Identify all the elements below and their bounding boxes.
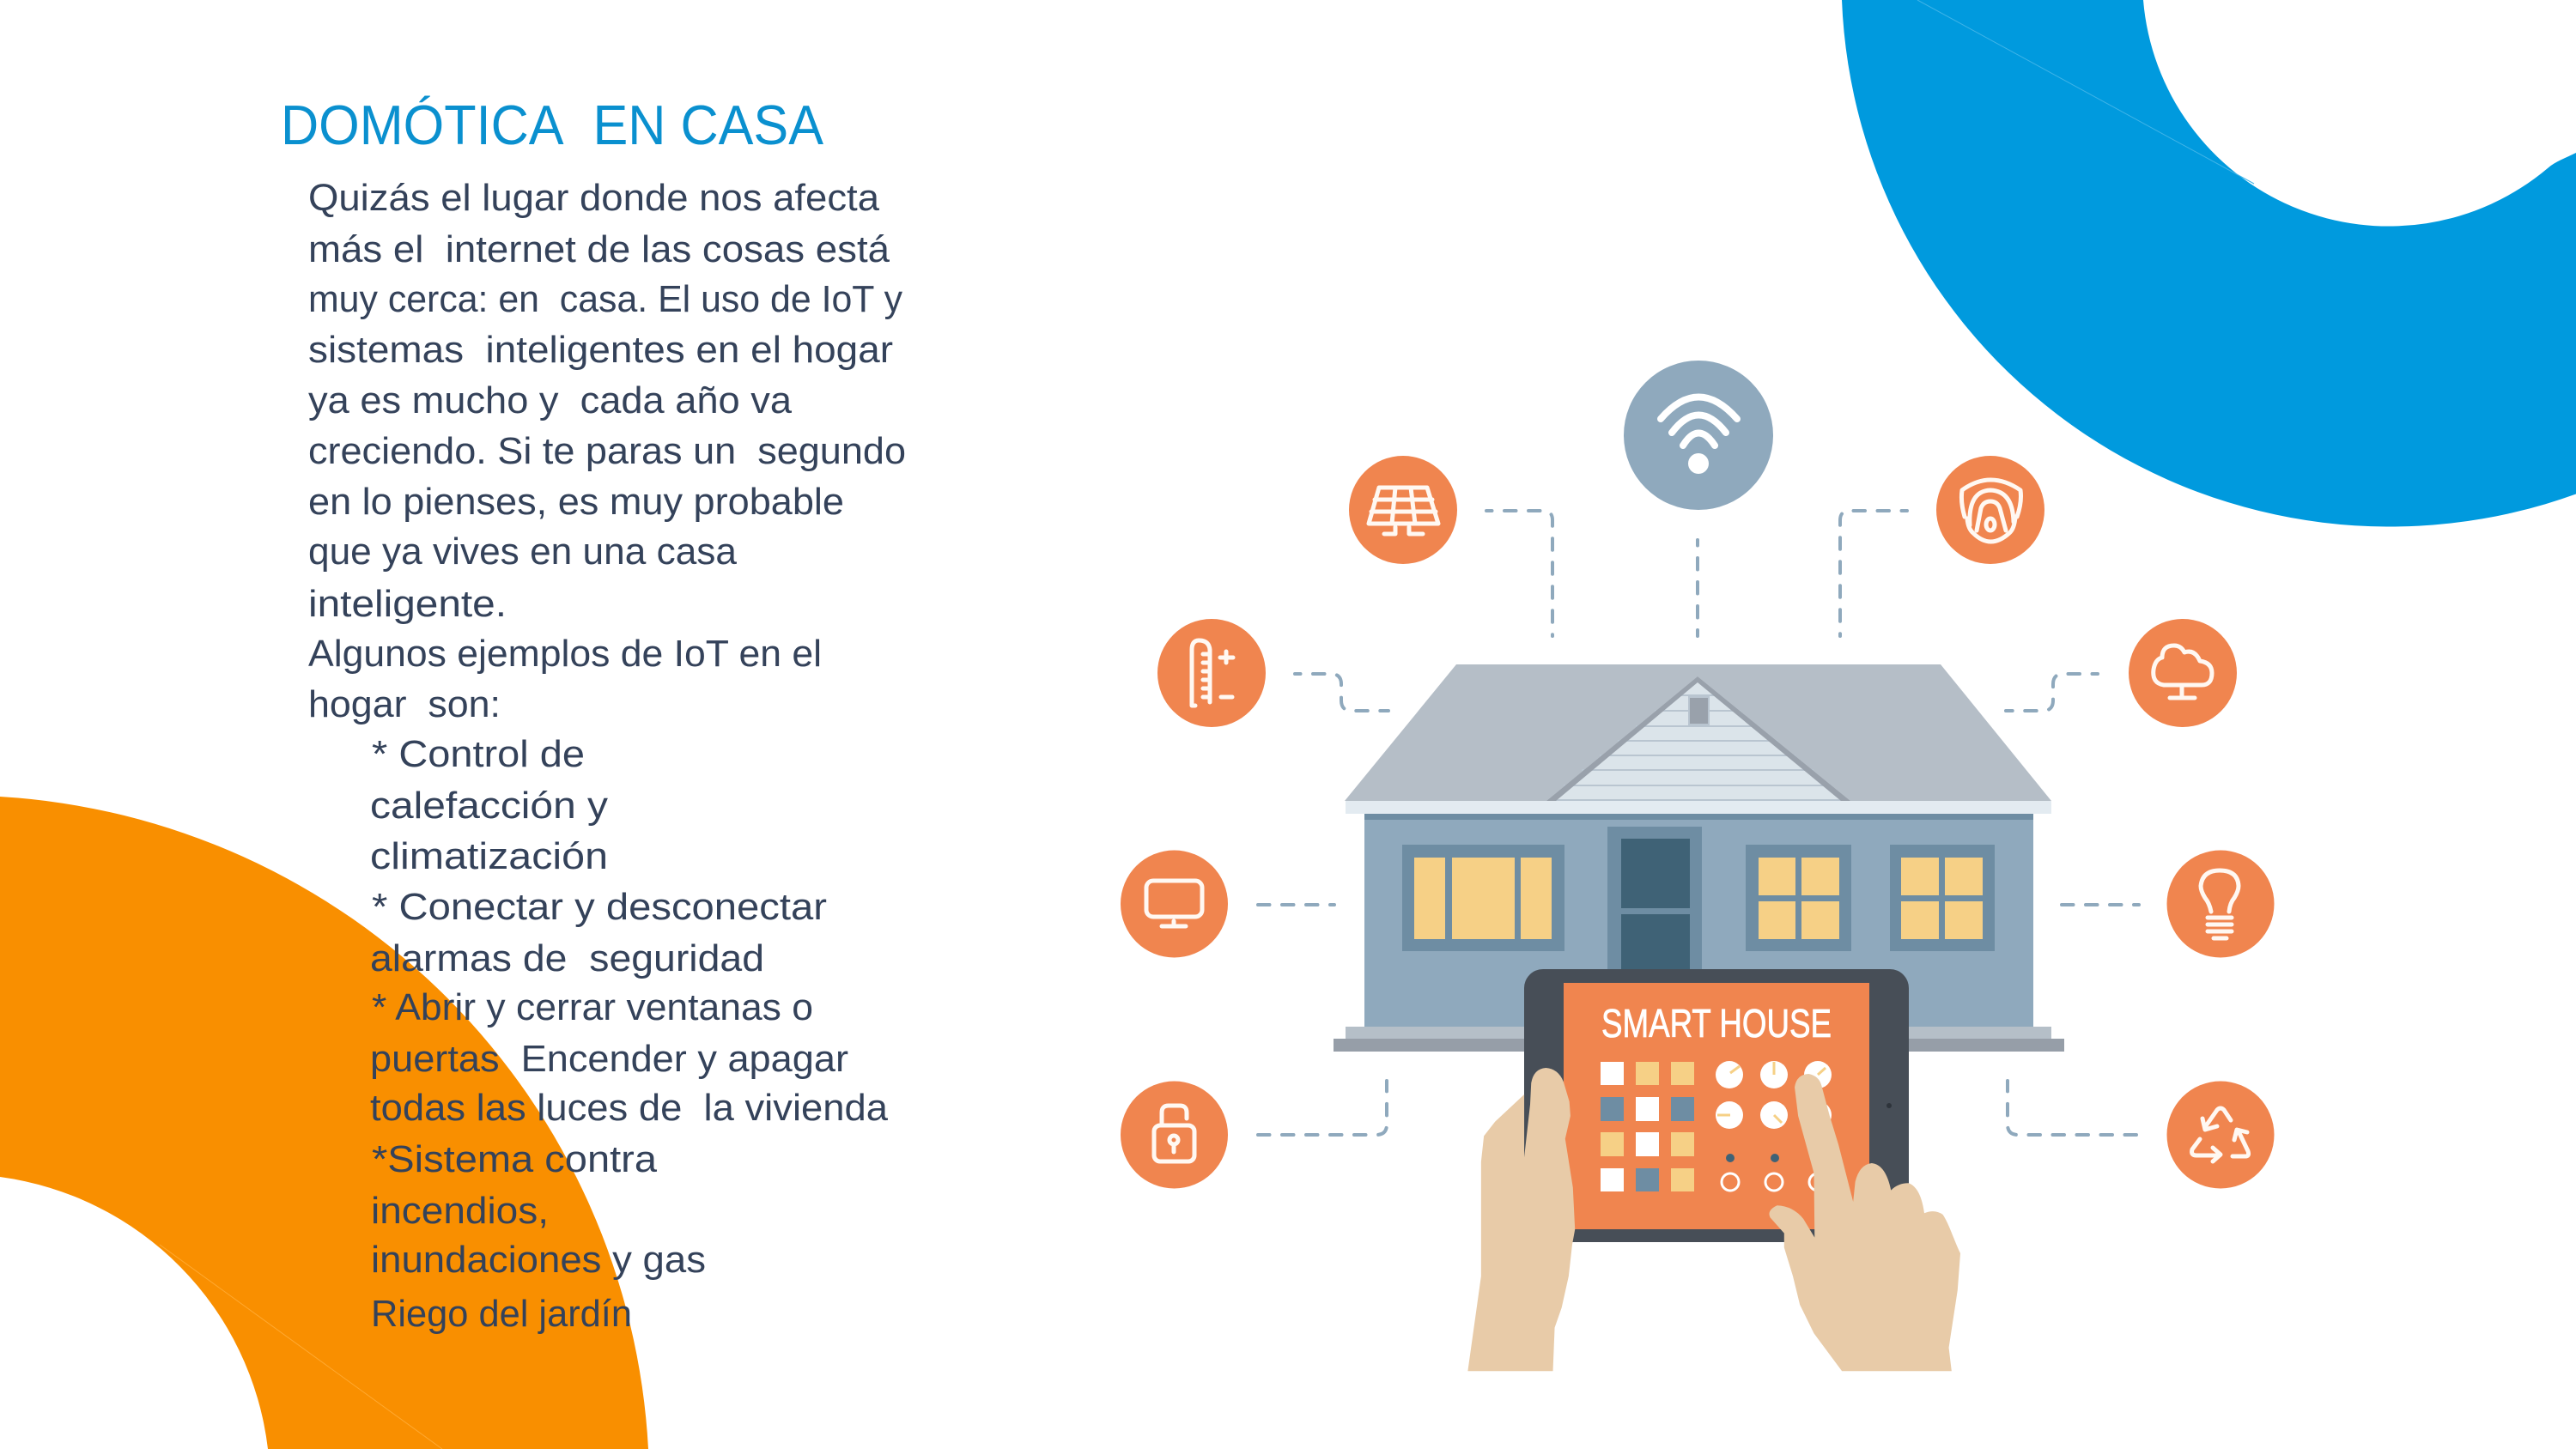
toggle switches	[1722, 1154, 1826, 1191]
tablet body	[1524, 969, 1909, 1242]
body text: creciendo. Si te paras un segundo	[308, 430, 906, 472]
body text: *Sistema contra	[372, 1138, 658, 1180]
body text: inundaciones y gas	[371, 1239, 706, 1281]
body text: Algunos ejemplos de IoT en el	[308, 633, 822, 675]
foundation steps	[1346, 1027, 2051, 1039]
icon: monitor	[1121, 850, 1228, 958]
title: DOMÓTICA EN CASA	[281, 94, 824, 156]
body text: en lo pienses, es muy probable	[308, 481, 844, 523]
door	[1607, 827, 1702, 973]
body text: inteligente.	[308, 583, 507, 625]
body text: hogar son:	[308, 683, 501, 725]
middle window	[1746, 845, 1851, 951]
body text: muy cerca: en casa. El uso de IoT y	[308, 278, 902, 320]
icon: light bulb	[2167, 850, 2274, 958]
body text: más el internet de las cosas está	[308, 228, 890, 270]
body text: calefacción y	[370, 785, 608, 827]
body text: sistemas inteligentes en el hogar	[308, 329, 893, 371]
icon: padlock	[1121, 1082, 1228, 1188]
body text: todas las luces de la vivienda	[370, 1087, 889, 1129]
body text: * Abrir y cerrar ventanas o	[372, 986, 813, 1028]
attic vent	[1688, 696, 1710, 726]
control dials	[1716, 1061, 1832, 1129]
body text: Quizás el lugar donde nos afecta	[308, 177, 880, 219]
hands	[1467, 1068, 1960, 1371]
tablet screen	[1564, 983, 1869, 1229]
body text: alarmas de seguridad	[370, 937, 764, 979]
house	[1334, 664, 2064, 1052]
decorative blue ring, top right	[1842, 0, 2576, 527]
eave	[1346, 801, 2051, 814]
left hand	[1467, 1068, 1575, 1371]
icon: security camera	[1936, 456, 2044, 564]
dashed connector lines	[1258, 511, 2139, 1135]
body text: que ya vives en una casa	[308, 530, 738, 573]
right hand	[1769, 1074, 1960, 1371]
camera lens	[1886, 1103, 1892, 1108]
right window	[1890, 845, 1995, 951]
gable	[1546, 676, 1850, 801]
decorative orange ring, bottom left	[0, 797, 648, 1449]
body text	[308, 177, 906, 1335]
body text: Riego del jardín	[371, 1293, 632, 1335]
body text: * Conectar y desconectar	[372, 886, 827, 928]
icon: cloud	[2129, 619, 2237, 727]
icon: recycle arrows	[2167, 1082, 2274, 1188]
icon: solar panel	[1349, 456, 1457, 564]
control squares	[1601, 1062, 1694, 1191]
body text: incendios,	[371, 1190, 549, 1232]
icon: thermometer	[1157, 619, 1266, 727]
tablet	[1524, 969, 1909, 1242]
left window	[1402, 845, 1564, 951]
body text: ya es mucho y cada año va	[308, 379, 793, 421]
body text: * Control de	[372, 733, 585, 775]
icon: wifi	[1624, 361, 1773, 510]
body text: climatización	[370, 835, 608, 877]
wall	[1364, 814, 2033, 1027]
roof	[1345, 664, 2051, 801]
screen heading: SMART HOUSE	[1601, 1001, 1832, 1046]
body text: puertas Encender y apagar	[370, 1038, 848, 1080]
